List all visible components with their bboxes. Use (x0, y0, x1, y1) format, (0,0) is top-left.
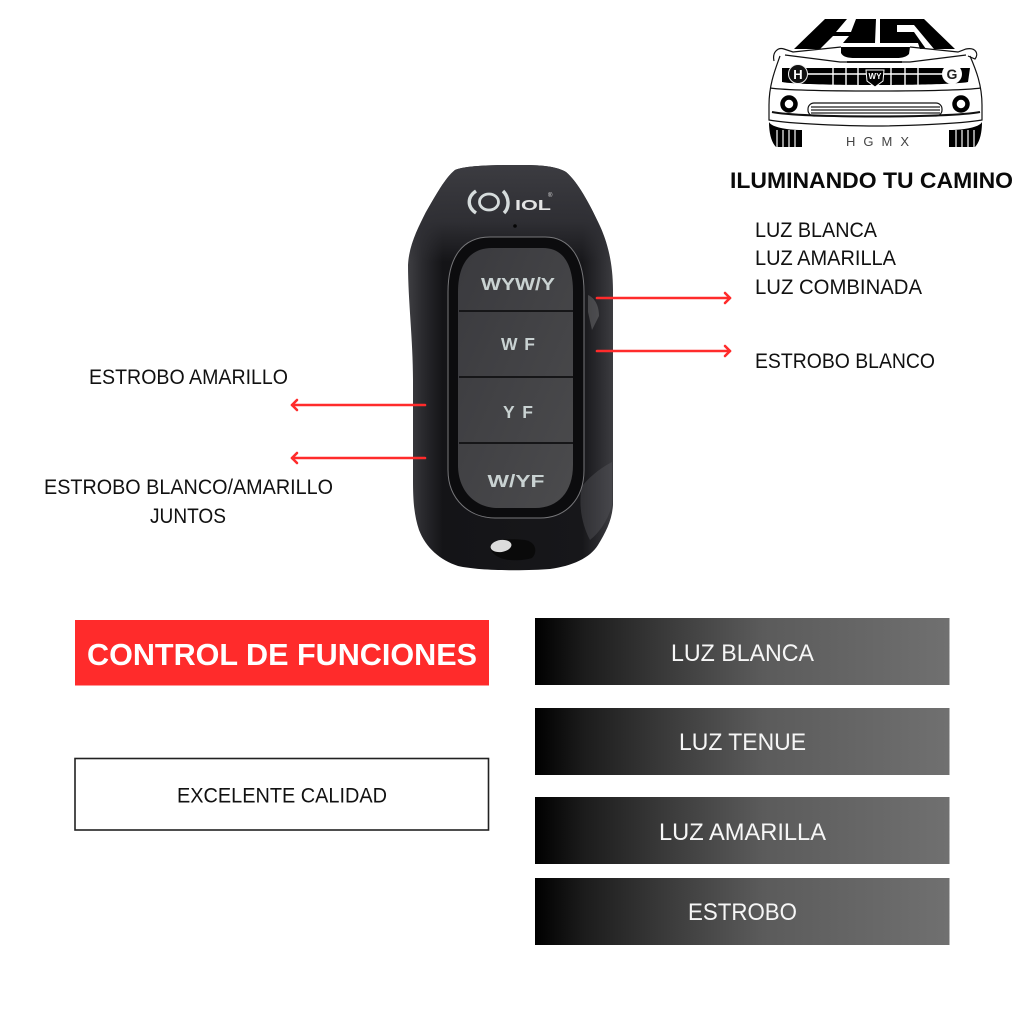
remote body (408, 165, 613, 570)
key ring hole (490, 539, 535, 560)
function bar: luz amarilla (535, 797, 950, 864)
button panel ring (448, 237, 584, 518)
headlight H (788, 64, 808, 84)
combined strobe label: JUNTOS (150, 505, 226, 528)
wheels (769, 122, 982, 147)
function bar: luz blanca: LUZ BLANCA (671, 640, 815, 667)
headlight H: H (793, 67, 803, 82)
function bar: luz amarilla: LUZ AMARILLA (659, 819, 827, 846)
function bar: estrobo (535, 878, 950, 945)
right button descriptions (755, 219, 922, 299)
logo: HG car (769, 19, 982, 149)
combined strobe label: ESTROBO BLANCO/AMARILLO (44, 476, 333, 499)
arrow to white, yellow and combined light (597, 293, 730, 303)
function bar: luz tenue (535, 708, 950, 775)
button label YF: YF (503, 402, 533, 422)
arrow to combined strobe (292, 453, 425, 463)
car body outline (769, 47, 982, 126)
upper shell shading (408, 165, 613, 570)
remote brand logo: ® (548, 192, 553, 199)
function bar: luz tenue: LUZ TENUE (679, 729, 806, 756)
headlight G: G (947, 66, 958, 82)
remote control photo (408, 165, 613, 570)
HG letters on hood (794, 19, 955, 49)
fog lights (782, 98, 968, 110)
button panel face (458, 248, 573, 508)
combined strobe label (44, 476, 333, 528)
hood scoop (841, 47, 910, 58)
upper grille (782, 68, 970, 85)
button dividers (459, 311, 573, 443)
grille badge (866, 70, 884, 87)
function bar: luz blanca (535, 618, 950, 685)
heading banner: control de funciones: CONTROL DE FUNCIONES (87, 637, 477, 672)
button label WYW/Y: WYW/Y (481, 274, 555, 294)
white strobe label: ESTROBO BLANCO (755, 350, 935, 373)
quality box: EXCELENTE CALIDAD (177, 784, 387, 808)
arrow to white strobe (597, 346, 730, 356)
lower body highlight (580, 462, 612, 540)
side highlight (588, 295, 599, 330)
remote brand logo: IOL (515, 197, 551, 214)
function bar: estrobo: ESTROBO (688, 899, 797, 926)
tagline: ILUMINANDO TU CAMINO (730, 168, 1013, 193)
arrows (292, 293, 730, 463)
heading banner: control de funciones (75, 620, 489, 686)
hood line (847, 61, 902, 63)
yellow strobe label: ESTROBO AMARILLO (89, 366, 288, 389)
G letter cut (897, 25, 934, 49)
logo wordmark: HGMX (846, 134, 909, 149)
right button descriptions: LUZ AMARILLA (755, 247, 896, 270)
button label WF: WF (501, 334, 535, 354)
remote brand logo (469, 191, 553, 214)
arrow to yellow strobe (292, 400, 425, 410)
bumper grille (811, 107, 940, 113)
sensor dot (513, 224, 517, 228)
right button descriptions: LUZ COMBINADA (755, 276, 922, 299)
right button descriptions: LUZ BLANCA (755, 219, 877, 242)
button label W/YF: W/YF (488, 471, 545, 491)
headlight G (942, 64, 962, 84)
quality box (75, 758, 488, 830)
grille badge: WY (869, 72, 882, 81)
